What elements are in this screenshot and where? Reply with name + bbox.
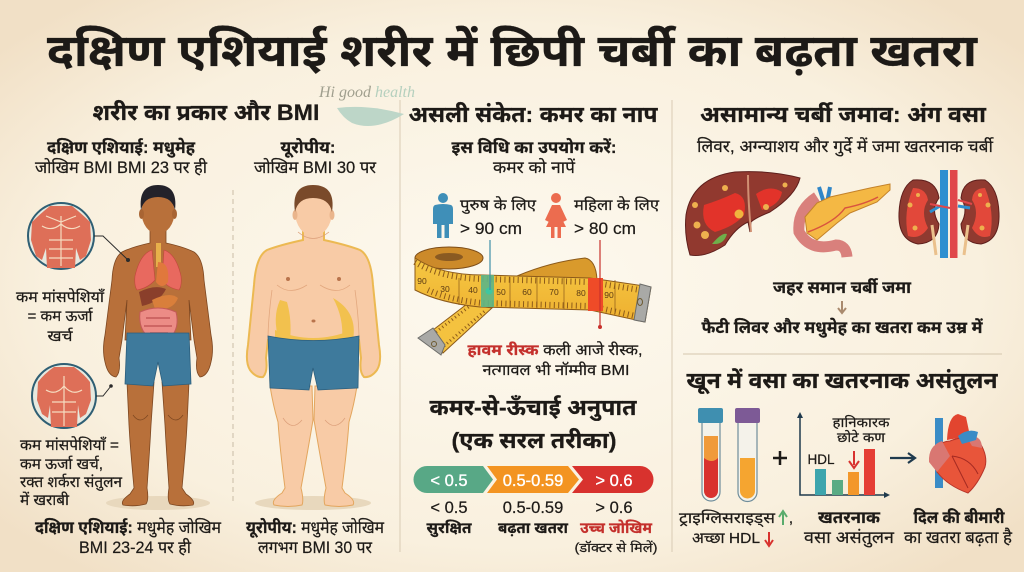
- fatty liver text: फैटी लिवर और मधुमेह का खतरा कम उम्र में: [702, 318, 983, 338]
- watermark logo: [318, 84, 415, 126]
- european label: यूरोपीय:: [280, 139, 336, 158]
- icon: heart: [929, 414, 986, 493]
- icon: muscle inset top: [28, 203, 94, 269]
- shorts: [125, 333, 191, 386]
- south asian risk note: दक्षिण एशियाई: मधुमेह जोखिम: [35, 518, 222, 538]
- icon: kidneys and vessels: [899, 170, 999, 258]
- method text: कमर को नापें: [493, 158, 576, 177]
- heart risk label: [904, 508, 1012, 547]
- ratio legend: safe: सुरक्षित: [426, 520, 472, 538]
- heart risk label: का खतरा बढ़ता है: [904, 528, 1012, 547]
- connector line bottom: [96, 384, 113, 396]
- heading: body type: शरीर का प्रकार और BMI: [92, 100, 320, 125]
- organs: [135, 243, 181, 350]
- panel: blood fat imbalance: [679, 368, 1012, 548]
- method text: इस विधि का उपयोग करें:: [452, 138, 616, 157]
- ratio legend: rising: बढ़ता खतरा: [498, 520, 569, 537]
- bar chart: HDL: [807, 452, 835, 467]
- heading: blood fat: खून में वसा का खतरनाक असंतुलन: [686, 368, 998, 395]
- heading: waist-to-height ratio: [430, 395, 637, 453]
- plus sign: [773, 451, 787, 465]
- measuring tape: 50: [496, 287, 506, 297]
- heading: waist-to-height ratio: कमर-से-ऊँचाई अनुपात: [430, 395, 637, 421]
- connector line top: [94, 236, 130, 262]
- ratio scale bar: < 0.5: [430, 472, 468, 490]
- south asian risk note: [35, 518, 222, 557]
- women threshold: > 80 cm: [574, 219, 636, 238]
- bar chart: छोटे कण: [837, 428, 885, 445]
- tape caption: हावम रीस्क कली आजे रीस्क,: [468, 341, 642, 359]
- icon: muscle inset bottom: [32, 364, 96, 428]
- ratio legend: high: उच्च जोखिम: [580, 520, 652, 537]
- icon: pancreas: [799, 184, 890, 257]
- icon: test tubes: [698, 408, 760, 502]
- european risk note: यूरोपीय: मधुमेह जोखिम: [246, 518, 385, 538]
- marker line: women: [598, 240, 602, 329]
- south asian risk note: BMI 23-24 पर ही: [79, 539, 192, 557]
- heading: waist: असली संकेत: कमर का नाप: [408, 102, 658, 127]
- bar chart: [797, 412, 890, 498]
- south asian label: [35, 138, 208, 177]
- heart risk label: दिल की बीमारी: [914, 508, 1006, 527]
- european label: [254, 139, 376, 177]
- figure: south asian man: [104, 185, 212, 510]
- muscle caption top: [16, 288, 105, 345]
- ratio legend: rising: 0.5-0.59: [503, 499, 563, 517]
- muscle caption bottom: कम मांसपेशियाँ =: [20, 436, 119, 454]
- measuring tape: 60: [522, 287, 532, 297]
- imbalance label: खतरनाक: [818, 509, 880, 527]
- title: दक्षिण एशियाई शरीर में छिपी चर्बी का बढ़ता खतरा: [47, 25, 978, 76]
- panel: body type and BMI: [16, 100, 385, 557]
- heading: waist-to-height ratio: (एक सरल तरीका): [452, 428, 616, 453]
- measuring tape: [415, 247, 651, 355]
- women threshold: [574, 195, 659, 238]
- men threshold: पुरुष के लिए: [460, 195, 536, 215]
- ratio scale bar: [414, 466, 654, 493]
- measuring tape: 30: [440, 284, 450, 294]
- ratio legend: rising: [498, 499, 569, 537]
- imbalance label: वसा असंतुलन: [804, 529, 895, 548]
- tape caption: नत्गावल भी नॉम्मीव BMI: [482, 362, 630, 379]
- icon: man: [433, 193, 453, 238]
- south asian label: दक्षिण एशियाई: मधुमेह: [47, 138, 196, 158]
- european risk note: लगभग BMI 30 पर: [258, 539, 372, 557]
- measuring tape: 40: [468, 285, 478, 295]
- ratio legend: safe: [426, 499, 472, 538]
- ratio scale bar: > 0.6: [595, 472, 633, 490]
- men threshold: [460, 195, 536, 238]
- toxic fat text: जहर समान चर्बी जमा: [773, 278, 912, 297]
- muscle caption top: = कम ऊर्जा: [28, 307, 94, 325]
- triglycerides label: अच्छा HDL: [692, 530, 760, 547]
- muscle caption bottom: [20, 436, 123, 509]
- measuring tape: 90: [417, 276, 427, 286]
- south asian label: जोखिम BMI BMI 23 पर ही: [35, 159, 208, 177]
- muscle caption bottom: में खराबी: [20, 491, 70, 509]
- arrow: to heart: [890, 453, 915, 463]
- ratio legend: safe: < 0.5: [430, 499, 468, 517]
- muscle caption top: खर्च: [48, 327, 74, 345]
- shorts: [268, 336, 359, 390]
- imbalance label: [804, 509, 895, 548]
- ratio legend: high: [574, 499, 658, 555]
- tape caption: [468, 341, 642, 379]
- marker line: men: [489, 240, 491, 290]
- panel: organ fat: [686, 102, 999, 338]
- ratio legend: high: (डॉक्टर से मिलें): [574, 540, 658, 555]
- muscle caption bottom: रक्त शर्करा संतुलन: [20, 473, 123, 492]
- arrow: down: [838, 301, 846, 313]
- organ subheading: लिवर, अग्न्याशय और गुर्दे में जमा खतरनाक चर्बी: [697, 137, 994, 157]
- icon: woman: [545, 193, 567, 238]
- figure: european man: [247, 185, 380, 510]
- muscle caption bottom: कम ऊर्जा खर्च,: [20, 455, 103, 473]
- european risk note: [246, 518, 385, 557]
- panel: waist measure: [408, 102, 659, 555]
- triglycerides label: ,: [789, 510, 793, 527]
- triglycerides label: [679, 510, 793, 547]
- icon: liver: [686, 172, 800, 256]
- measuring tape: 80: [576, 288, 586, 298]
- measuring tape: 70: [549, 287, 559, 297]
- triglycerides label: ट्राइग्लिसराइड्स: [679, 510, 776, 528]
- women threshold: महिला के लिए: [574, 195, 659, 214]
- european label: जोखिम BMI 30 पर: [254, 159, 376, 177]
- muscle caption top: कम मांसपेशियाँ: [16, 288, 105, 306]
- bar chart: हानिकारक: [832, 414, 890, 430]
- heading: organ fat: असामान्य चर्बी जमाव: अंग वसा: [700, 102, 987, 127]
- measuring tape: 90: [604, 290, 614, 300]
- method text: [452, 138, 616, 177]
- men threshold: > 90 cm: [460, 219, 522, 238]
- watermark logo: Hi good health: [318, 84, 415, 101]
- ratio legend: high: > 0.6: [595, 499, 633, 517]
- ratio scale bar: 0.5-0.59: [503, 472, 563, 490]
